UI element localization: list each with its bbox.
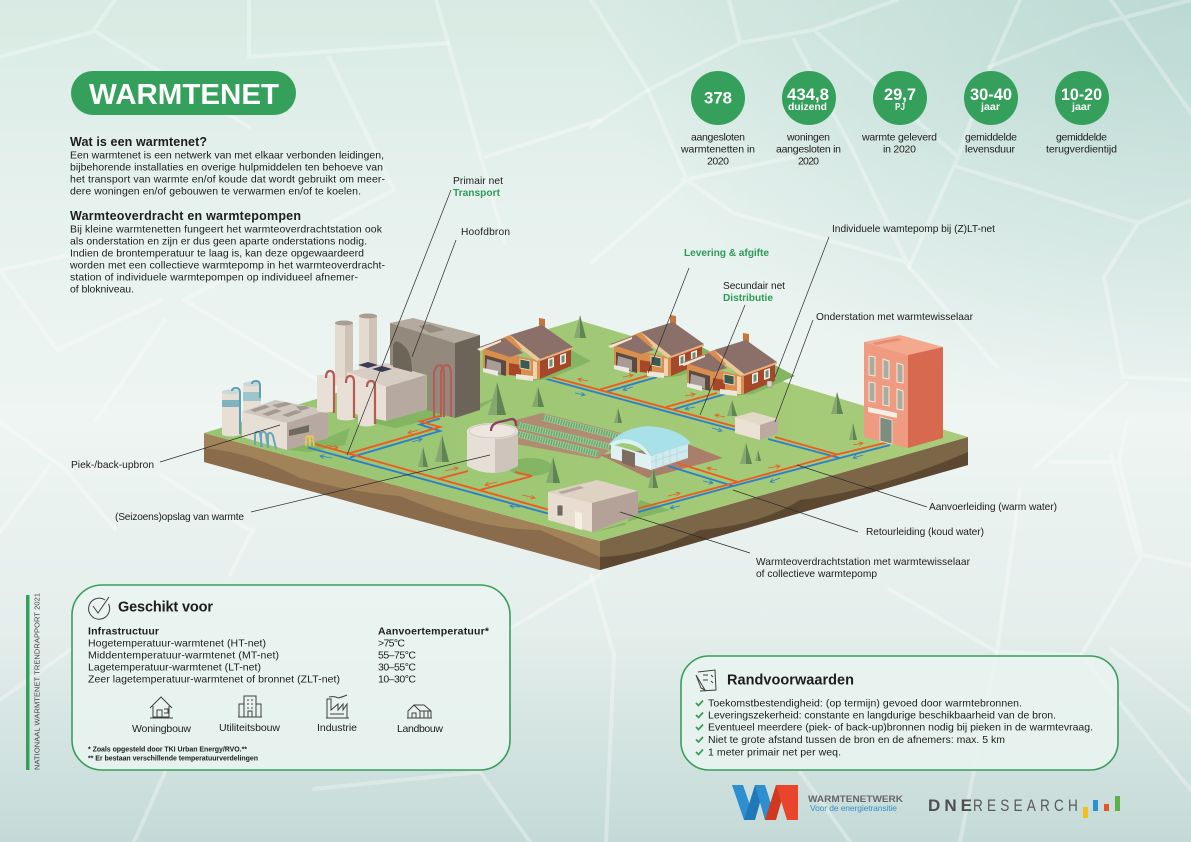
building: seasonal heat storage tank — [467, 419, 518, 473]
icon: checklist with pencil — [696, 670, 716, 691]
icon: utiliteitsbouw — [238, 696, 262, 717]
text block: wat is een warmtenet: Wat is een warmtenet? — [70, 135, 207, 149]
label: landbouw: Landbouw — [397, 723, 443, 735]
kpi: levensduur: 30-40 — [970, 85, 1012, 104]
table: infrastructure and temperature: Aanvoertemperatuur* — [378, 626, 490, 638]
footnotes: * Zoals opgesteld door TKI Urban Energy/RVO.** — [88, 746, 247, 754]
kpi: aangesloten warmtenetten: aangesloten — [691, 132, 745, 144]
table: infrastructure and temperature: Hogetemperatuur-warmtenet (HT-net) — [88, 638, 266, 650]
map labels: Piek-/back-upbron — [71, 460, 154, 471]
checklist — [696, 698, 1093, 758]
icon: woningbouw — [150, 697, 173, 718]
building: heat transfer station — [548, 480, 638, 532]
title pill: WARMTENET — [89, 79, 279, 111]
table: infrastructure and temperature: 10–30°C — [378, 674, 416, 686]
logo: dne research: RESEARCH — [973, 797, 1078, 815]
table: infrastructure and temperature: 30–55°C — [378, 662, 416, 674]
text block: warmteoverdracht en warmtepompen: worden met een collectieve warmtepomp in het warmteoverdracht- — [69, 260, 386, 272]
kpi: terugverdientijd: 10-20 — [1061, 85, 1102, 104]
table: infrastructure and temperature: 55–75°C — [378, 650, 416, 662]
label: industrie: Industrie — [317, 722, 357, 734]
kpi: levensduur: levensduur — [965, 144, 1016, 156]
pipes: supply (orange) and return (blue) — [308, 375, 890, 514]
panel: geschikt voor — [72, 585, 510, 770]
kpi: warmte geleverd — [861, 71, 937, 156]
panel: randvoorwaarden — [681, 656, 1118, 770]
kpi: warmte geleverd: PJ — [895, 101, 905, 113]
houses — [477, 315, 795, 396]
icon: industrie — [326, 695, 349, 718]
kpi: terugverdientijd: terugverdientijd — [1046, 144, 1117, 156]
table: infrastructure and temperature: Lagetemperatuur-warmtenet (LT-net) — [88, 662, 261, 674]
title pill — [71, 71, 296, 115]
checklist: Niet te grote afstand tussen de bron en de afnemers: max. 5 km — [708, 734, 1005, 746]
text block: wat is een warmtenet: het transport van warmte en/of koude dat wordt gebruikt om meer- — [70, 174, 386, 186]
kpi: woningen aangesloten: aangesloten in — [776, 144, 841, 156]
kpi: woningen aangesloten: duizend — [788, 101, 827, 113]
logo: warmtenetwerk: Voor de energietransitie — [810, 803, 897, 813]
map labels: Hoofdbron — [461, 227, 510, 238]
icon: check in circle — [89, 597, 110, 619]
kpi: warmte geleverd: 29,7 — [884, 85, 916, 104]
logo: dne research — [928, 796, 1120, 818]
kpi: levensduur: jaar — [980, 101, 1000, 113]
logo: dne research: DNE — [928, 796, 972, 815]
kpi: warmte geleverd: warmte geleverd — [861, 132, 937, 144]
kpi: warmte geleverd: in 2020 — [883, 144, 916, 156]
map labels: Onderstation met warmtewisselaar — [816, 312, 974, 323]
label: woningbouw: Woningbouw — [132, 723, 191, 735]
text block: warmteoverdracht en warmtepompen — [69, 209, 386, 296]
map labels: Retourleiding (koud water) — [866, 527, 984, 538]
leader lines — [160, 190, 927, 553]
footnotes: ** Er bestaan verschillende temperatuurverdelingen — [88, 756, 258, 762]
logo: warmtenetwerk — [732, 785, 903, 820]
map labels: Individuele wamtepomp bij (Z)LT-net — [832, 224, 995, 235]
map labels: Secundair net — [723, 281, 785, 292]
text block: wat is een warmtenet — [70, 135, 386, 198]
icon: landbouw — [407, 705, 432, 718]
map labels: (Seizoens)opslag van warmte — [115, 512, 244, 523]
side label: NATIONAAL WARMTENET TRENDRAPPORT 2021 — [32, 593, 42, 770]
crop field — [516, 413, 723, 478]
checklist: 1 meter primair net per weq. — [708, 746, 841, 758]
footnotes — [88, 746, 258, 762]
text block: wat is een warmtenet: Een warmtenet is een netwerk van met elkaar verbonden leidingen, — [70, 150, 384, 162]
kpi: levensduur: gemiddelde — [965, 132, 1017, 144]
text block: warmteoverdracht en warmtepompen: Warmteoverdracht en warmtepompen — [70, 209, 301, 223]
text block: warmteoverdracht en warmtepompen: of blokniveau. — [70, 284, 134, 296]
text block: warmteoverdracht en warmtepompen: als onderstation en zijn er dus geen aparte onderstations nodig. — [70, 236, 367, 248]
table: infrastructure and temperature: Middentemperatuur-warmtenet (MT-net) — [88, 650, 279, 662]
map labels: Levering & afgifte — [684, 248, 769, 259]
building: apartment block — [864, 335, 943, 448]
table: infrastructure and temperature — [88, 626, 490, 686]
text block: wat is een warmtenet: bijbehorende installaties en overige hulpmiddelen ten behoeve van — [70, 162, 383, 174]
kpi: levensduur — [964, 71, 1018, 156]
kpi: woningen aangesloten: woningen — [786, 132, 830, 144]
text block: wat is een warmtenet: dere woningen en/of gebouwen te verwarmen en/of te koelen. — [70, 186, 361, 198]
kpi: aangesloten warmtenetten — [680, 71, 755, 168]
table: infrastructure and temperature: Infrastructuur — [88, 626, 159, 638]
side label — [26, 593, 42, 770]
map labels: Aanvoerleiding (warm water) — [929, 502, 1057, 513]
map labels: Distributie — [723, 293, 773, 304]
kpi: woningen aangesloten: 434,8 — [787, 85, 829, 104]
kpi: aangesloten warmtenetten: 2020 — [707, 156, 729, 168]
kpi: woningen aangesloten: 2020 — [798, 156, 819, 168]
trees — [418, 315, 857, 488]
isometric platform — [204, 320, 968, 570]
label: utiliteitsbouw: Utiliteitsbouw — [219, 722, 280, 734]
kpi: terugverdientijd: gemiddelde — [1056, 132, 1107, 144]
checklist: Leveringszekerheid: constante en langdurige beschikbaarheid van de bron. — [708, 710, 1056, 722]
kpi: terugverdientijd: jaar — [1071, 101, 1091, 113]
kpi: woningen aangesloten — [776, 71, 841, 168]
table: infrastructure and temperature: >75°C — [378, 638, 405, 650]
table: infrastructure and temperature: Zeer lagetemperatuur-warmtenet of bronnet (ZLT-net) — [88, 674, 340, 686]
map labels — [71, 176, 1057, 580]
heading: geschikt voor: Geschikt voor — [118, 600, 213, 616]
checklist: Eventueel meerdere (piek- of back-up)bronnen nodig bij pieken in de warmtevraag. — [708, 722, 1093, 734]
building: main heat source with chimneys — [317, 314, 480, 426]
text block: warmteoverdracht en warmtepompen: station of individuele warmtepompen op individueel afnemer- — [70, 272, 358, 284]
text block: warmteoverdracht en warmtepompen: Indien de brontemperatuur te laag is, kan deze opgewaardeerd — [70, 248, 364, 260]
flow arrows — [320, 375, 863, 508]
greenhouse — [609, 426, 691, 470]
logo: warmtenetwerk: WARMTENETWERK — [808, 794, 903, 805]
checklist: Toekomstbestendigheid: (op termijn) gevoed door warmtebronnen. — [708, 698, 1022, 710]
map labels: Primair net — [453, 176, 503, 187]
heading: randvoorwaarden: Randvoorwaarden — [727, 672, 854, 688]
building: substation — [735, 412, 778, 440]
map labels: of collectieve warmtepomp — [756, 569, 877, 580]
kpi: aangesloten warmtenetten: 378 — [704, 88, 732, 108]
kpi: aangesloten warmtenetten: warmtenetten in — [680, 144, 755, 156]
text block: warmteoverdracht en warmtepompen: Bij kleine warmtenetten fungeert het warmteoverdrachtstation ook — [70, 224, 383, 236]
building: peak / back-up source — [222, 381, 328, 450]
map labels: Transport — [453, 188, 501, 199]
kpi: terugverdientijd — [1046, 71, 1117, 156]
map labels: Warmteoverdrachtstation met warmtewisselaar — [756, 557, 971, 568]
